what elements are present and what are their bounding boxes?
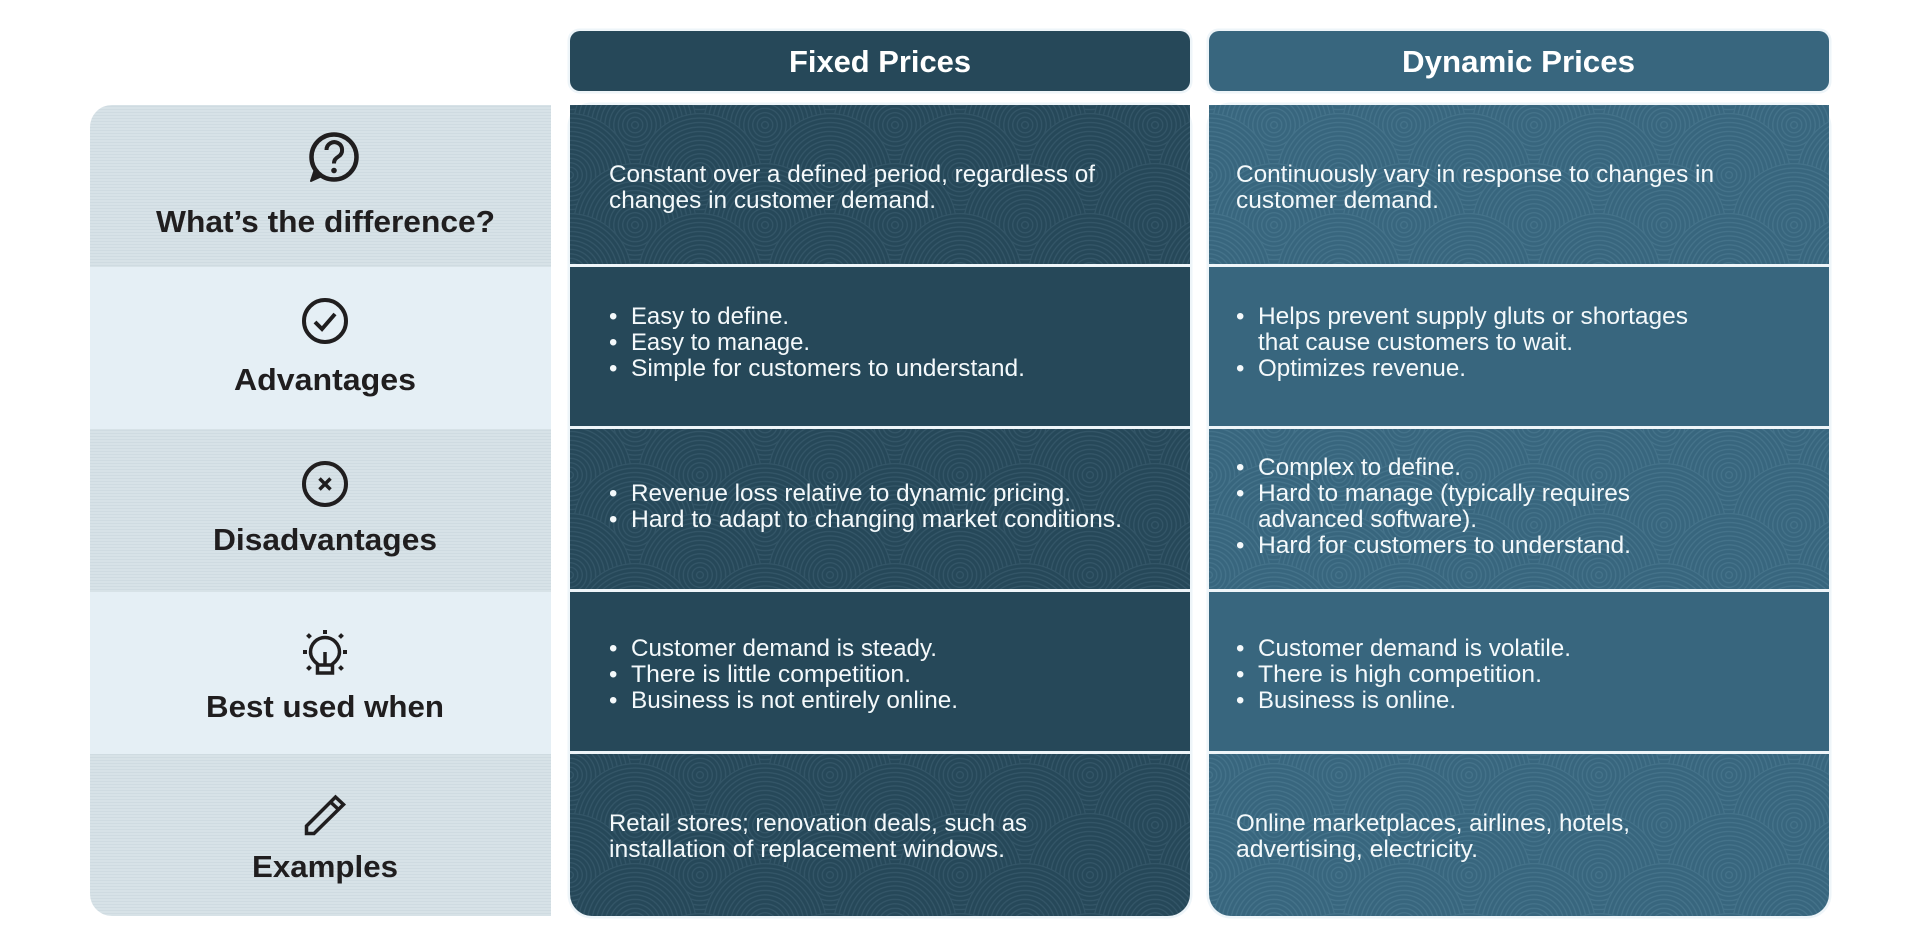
cell: fixed best used when: There is little competition.: [631, 661, 911, 688]
cell: dynamic advantages: •: [1236, 355, 1244, 382]
cell: fixed best used when: •: [609, 635, 617, 662]
cell: dynamic advantages: that cause customers to wait.: [1258, 329, 1573, 356]
cell: fixed examples: [570, 754, 1190, 916]
cell: fixed advantages: Easy to define.: [631, 303, 789, 330]
cell: dynamic difference: customer demand.: [1236, 187, 1439, 214]
cell: dynamic disadvantages: •: [1236, 532, 1244, 559]
cell: dynamic advantages: [1209, 267, 1829, 426]
icon: check circle: [304, 300, 346, 342]
cell: dynamic examples: [1209, 754, 1829, 916]
heading: what's the difference: What’s the difference?: [156, 204, 495, 239]
header: dynamic prices: [1206, 28, 1832, 94]
cell: dynamic advantages: Helps prevent supply gluts or shortages: [1258, 303, 1688, 330]
cell: dynamic difference: Continuously vary in response to changes in: [1236, 161, 1714, 188]
cell: dynamic examples: advertising, electricity.: [1236, 836, 1478, 863]
band: examples: [90, 754, 551, 916]
cell: dynamic disadvantages: Hard for customers to understand.: [1258, 532, 1631, 559]
cell: dynamic best used when: Business is online.: [1258, 687, 1456, 714]
cell: dynamic best used when: •: [1236, 687, 1244, 714]
cell: dynamic advantages: •: [1236, 303, 1244, 330]
heading: examples: Examples: [252, 849, 398, 884]
band: disadvantages: [90, 429, 551, 592]
cell: fixed examples: installation of replacement windows.: [609, 836, 1005, 863]
cell: fixed disadvantages: [570, 429, 1190, 589]
icon: cross circle: [304, 463, 346, 505]
cell: dynamic disadvantages: advanced software).: [1258, 506, 1477, 533]
heading: advantages: Advantages: [234, 362, 416, 397]
cell: fixed examples: Retail stores; renovation deals, such as: [609, 810, 1027, 837]
cell: fixed advantages: •: [609, 329, 617, 356]
cell: fixed best used when: Customer demand is steady.: [631, 635, 937, 662]
cell: fixed advantages: Easy to manage.: [631, 329, 810, 356]
icon: light bulb: [303, 630, 347, 673]
cell: dynamic difference: [1209, 105, 1829, 264]
cell: fixed disadvantages: Revenue loss relative to dynamic pricing.: [631, 480, 1071, 507]
cell: fixed difference: [570, 105, 1190, 264]
cell: fixed difference: Constant over a defined period, regardless of: [609, 161, 1095, 188]
cell: fixed advantages: •: [609, 303, 617, 330]
cell: dynamic disadvantages: Complex to define.: [1258, 454, 1461, 481]
column: fixed prices: [568, 28, 1192, 918]
header: fixed prices: [568, 28, 1192, 94]
cell: dynamic advantages: Optimizes revenue.: [1258, 355, 1466, 382]
icon: pencil: [306, 797, 344, 834]
band: what's the difference: [90, 105, 551, 267]
cell: fixed best used when: •: [609, 661, 617, 688]
cell: fixed disadvantages: •: [609, 480, 617, 507]
cell: dynamic disadvantages: [1209, 429, 1829, 589]
band: best used when: [90, 592, 551, 754]
cell: fixed advantages: [570, 267, 1190, 426]
cell: dynamic best used when: Customer demand is volatile.: [1258, 635, 1571, 662]
cell: fixed disadvantages: •: [609, 506, 617, 533]
header: dynamic prices: Dynamic Prices: [1402, 44, 1635, 79]
cell: dynamic best used when: •: [1236, 661, 1244, 688]
cell: dynamic disadvantages: •: [1236, 454, 1244, 481]
header: fixed prices: Fixed Prices: [789, 44, 971, 79]
cell: fixed advantages: Simple for customers to understand.: [631, 355, 1025, 382]
cell: fixed advantages: •: [609, 355, 617, 382]
icon: question speech bubble: [311, 134, 356, 181]
cell: fixed disadvantages: Hard to adapt to changing market conditions.: [631, 506, 1122, 533]
heading: disadvantages: Disadvantages: [213, 522, 437, 557]
cell: dynamic disadvantages: •: [1236, 480, 1244, 507]
cell: dynamic best used when: [1209, 592, 1829, 751]
cell: dynamic examples: Online marketplaces, airlines, hotels,: [1236, 810, 1630, 837]
cell: dynamic best used when: There is high competition.: [1258, 661, 1542, 688]
cell: fixed best used when: [570, 592, 1190, 751]
column: dynamic prices: [1206, 28, 1832, 918]
panel: row labels: [90, 105, 551, 916]
cell: fixed best used when: Business is not entirely online.: [631, 687, 958, 714]
cell: dynamic best used when: •: [1236, 635, 1244, 662]
cell: fixed difference: changes in customer demand.: [609, 187, 936, 214]
cell: dynamic disadvantages: Hard to manage (typically requires: [1258, 480, 1630, 507]
band: advantages: [90, 267, 551, 429]
heading: best used when: Best used when: [206, 689, 444, 724]
cell: fixed best used when: •: [609, 687, 617, 714]
